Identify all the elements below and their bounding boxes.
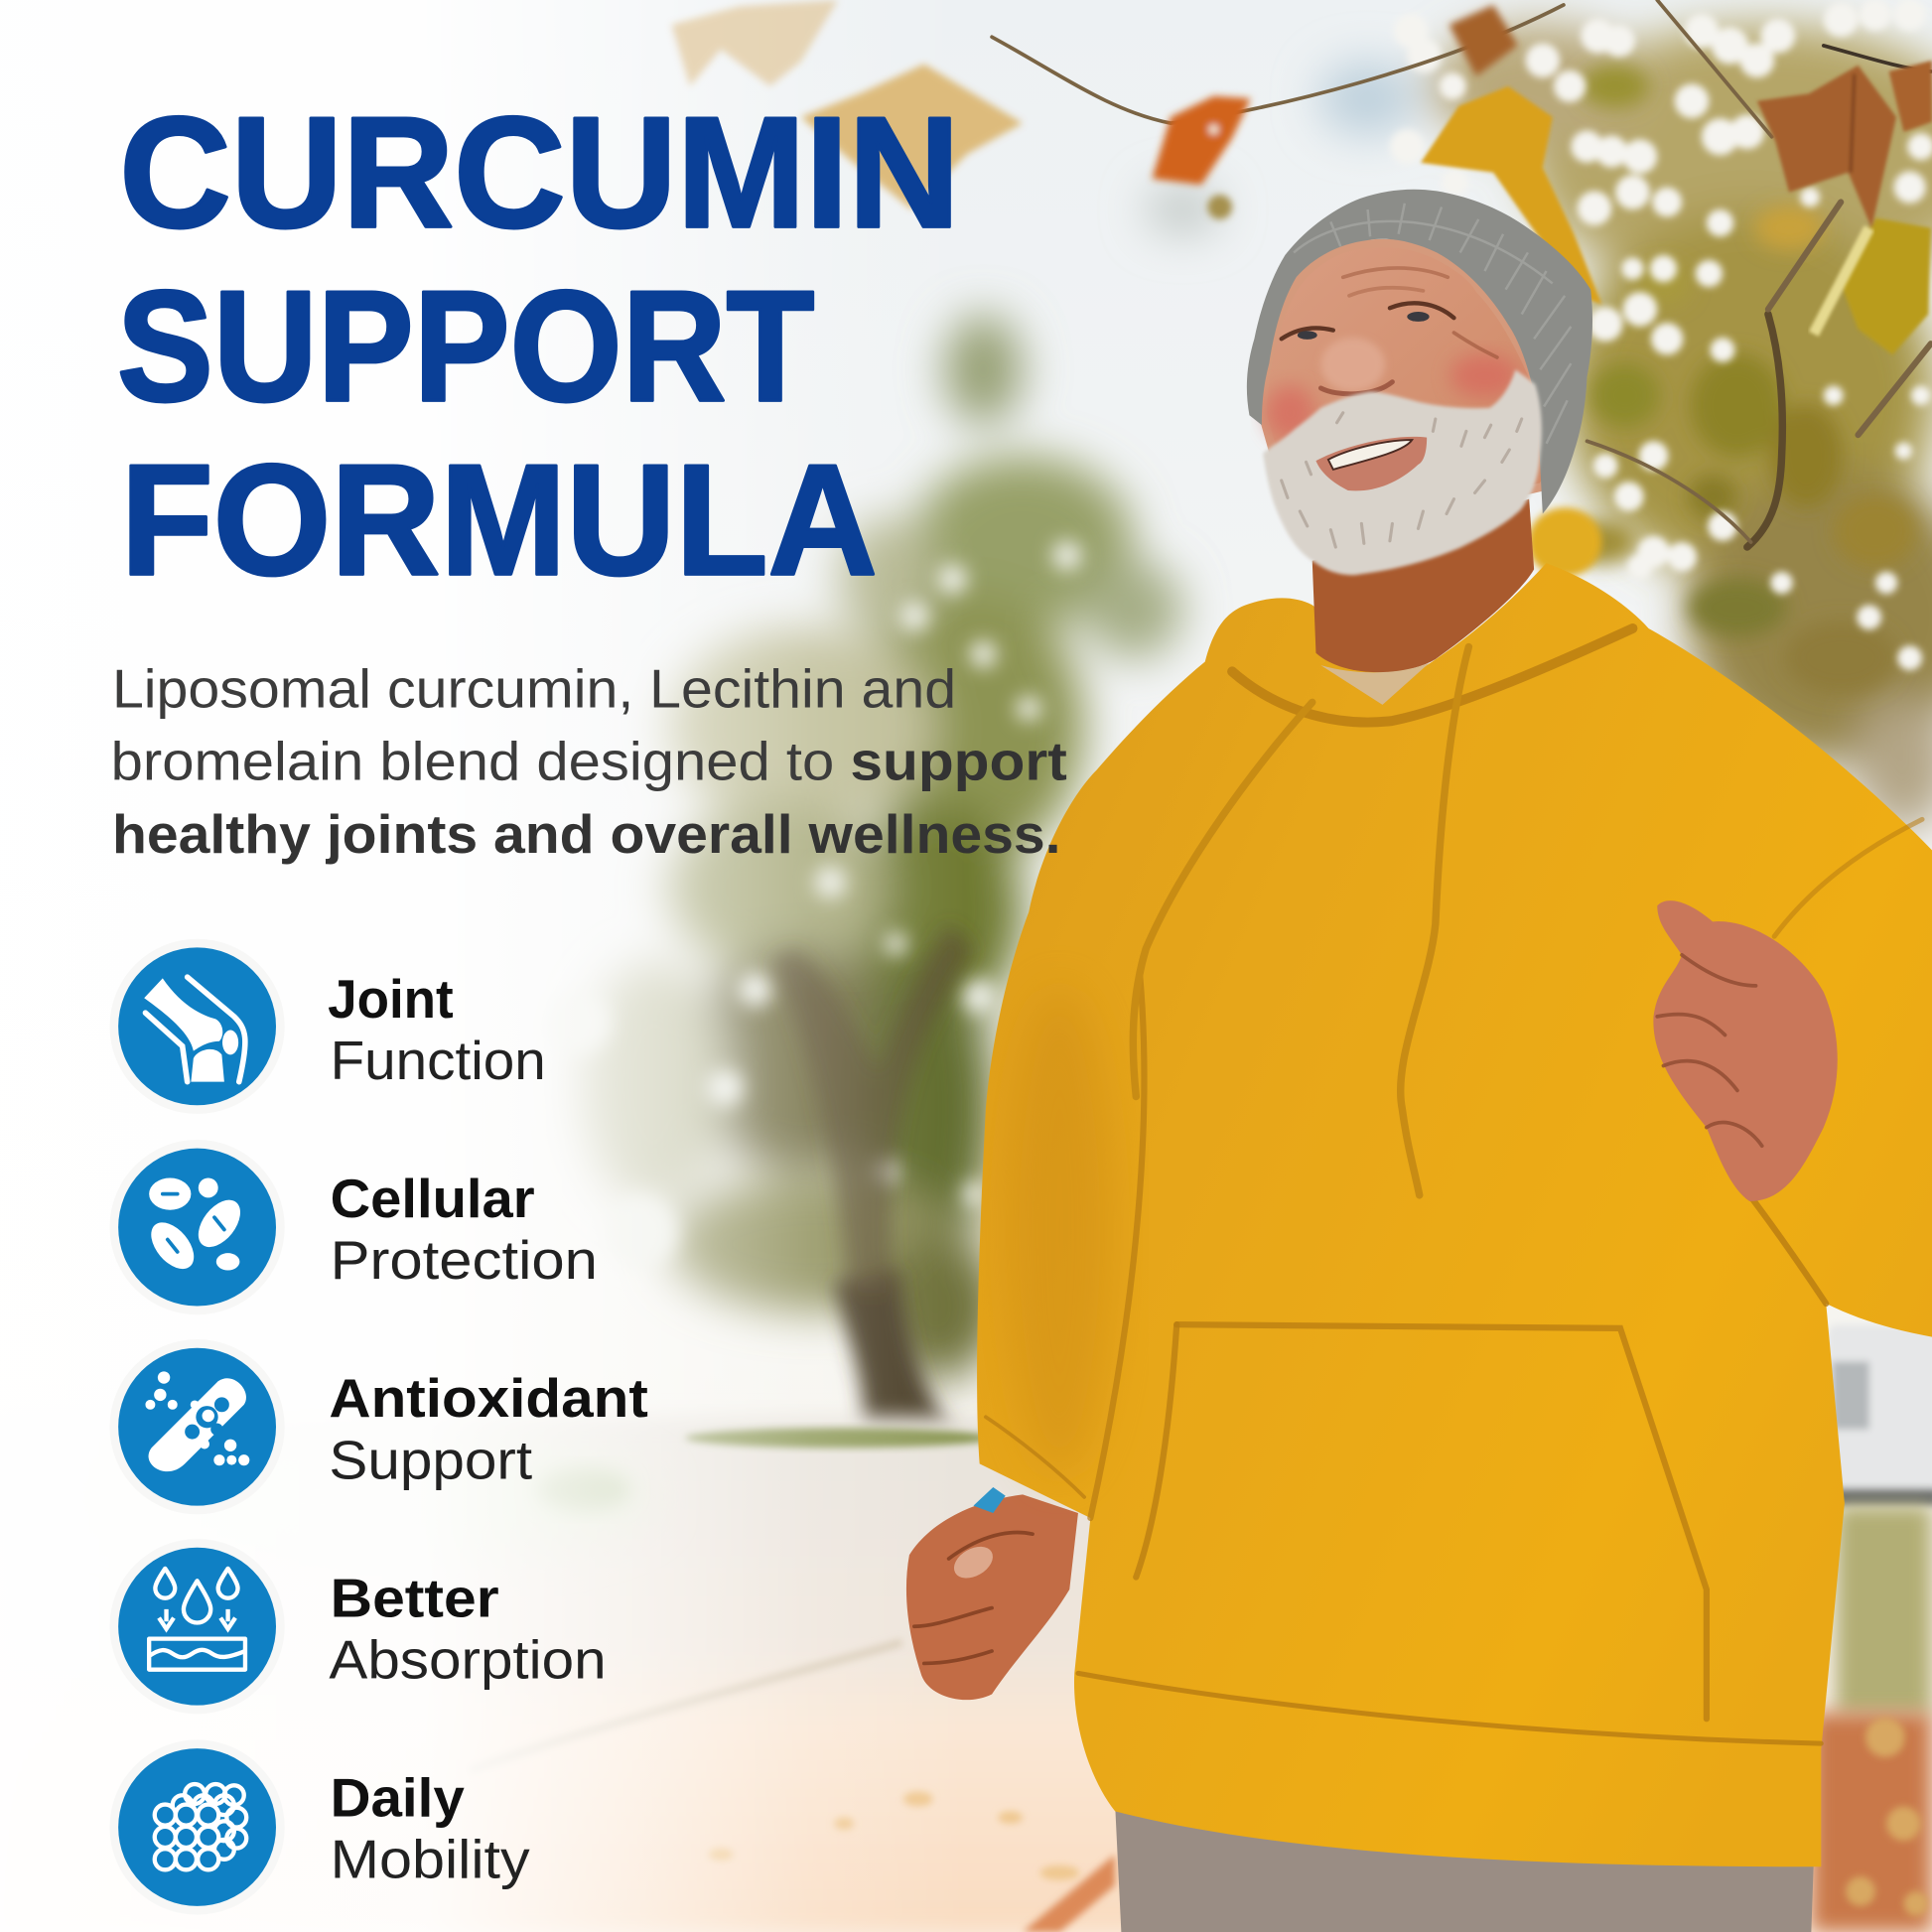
benefit: cellular protection xyxy=(109,1140,598,1314)
title: CURCUMIN xyxy=(119,83,960,260)
left hand xyxy=(906,1494,1078,1700)
benefit: antioxidant support xyxy=(109,1339,648,1514)
van xyxy=(1828,1324,1932,1506)
description paragraph: healthy joints and overall wellness. xyxy=(112,804,1061,865)
pants xyxy=(1115,1805,1814,1932)
leaf: yellow behind shoulder xyxy=(1528,507,1601,577)
benefit: cellular protection: Cellular xyxy=(331,1169,535,1229)
t-shirt collar xyxy=(1320,663,1430,705)
description paragraph xyxy=(111,658,1067,865)
icon: droplets and absorption layer xyxy=(109,1539,285,1714)
hoodie xyxy=(977,563,1932,1866)
benefit: cellular protection: Protection xyxy=(331,1230,598,1291)
beard xyxy=(1263,369,1542,575)
icon: cartilage lattice xyxy=(109,1739,285,1915)
tree trunk xyxy=(770,924,973,1442)
neck xyxy=(1312,499,1534,672)
icon: capsule and molecules xyxy=(109,1339,285,1514)
blurred mid-ground tree xyxy=(547,314,1182,1380)
ground and road xyxy=(0,1417,1159,1932)
benefit: joint function xyxy=(109,939,546,1114)
benefit: joint function: Joint xyxy=(328,969,454,1030)
title: SUPPORT xyxy=(117,257,814,434)
benefit: antioxidant support: Antioxidant xyxy=(329,1368,648,1429)
description paragraph: bromelain blend designed to support xyxy=(111,732,1067,792)
face xyxy=(1263,243,1560,530)
title xyxy=(117,83,960,608)
leaf: brown top right xyxy=(1757,61,1932,228)
benefit: better absorption xyxy=(109,1539,607,1714)
leaf: yellow-green right xyxy=(1841,218,1931,354)
benefit: joint function: Function xyxy=(331,1031,546,1091)
face details xyxy=(1282,268,1497,357)
benefit: better absorption: Absorption xyxy=(329,1629,607,1690)
benefit: daily mobility xyxy=(109,1739,530,1915)
leaf: brown upper xyxy=(1449,5,1518,76)
branches xyxy=(992,0,1931,547)
leaf: yellow upper xyxy=(801,65,1023,209)
right fist xyxy=(1653,900,1838,1201)
benefit: antioxidant support: Support xyxy=(329,1430,532,1490)
cheeks xyxy=(1450,353,1519,398)
leaf: pale upper left xyxy=(671,0,838,86)
watch xyxy=(973,1487,1006,1513)
description paragraph: Liposomal curcumin, Lecithin and xyxy=(112,658,956,719)
leaf: yellow beside the hat xyxy=(1421,86,1601,305)
nose xyxy=(1320,338,1392,394)
autumn foliage xyxy=(671,0,1932,832)
grass and path on right xyxy=(1811,1506,1932,1932)
runner photo xyxy=(906,190,1932,1932)
sleeve shadow xyxy=(1004,986,1115,1478)
eyes xyxy=(1298,312,1430,340)
teeth xyxy=(1328,440,1412,470)
leaf: orange xyxy=(1152,96,1251,219)
mouth xyxy=(1315,437,1427,490)
title: FORMULA xyxy=(121,431,878,608)
hat xyxy=(1247,190,1592,514)
drawstrings xyxy=(1133,647,1468,1195)
icon: cells xyxy=(109,1140,285,1314)
benefit: daily mobility: Daily xyxy=(331,1767,466,1828)
hoodie seams xyxy=(986,628,1922,1743)
icon: knee joint xyxy=(109,939,285,1114)
benefit: better absorption: Better xyxy=(331,1568,499,1628)
benefit: daily mobility: Mobility xyxy=(331,1829,530,1889)
